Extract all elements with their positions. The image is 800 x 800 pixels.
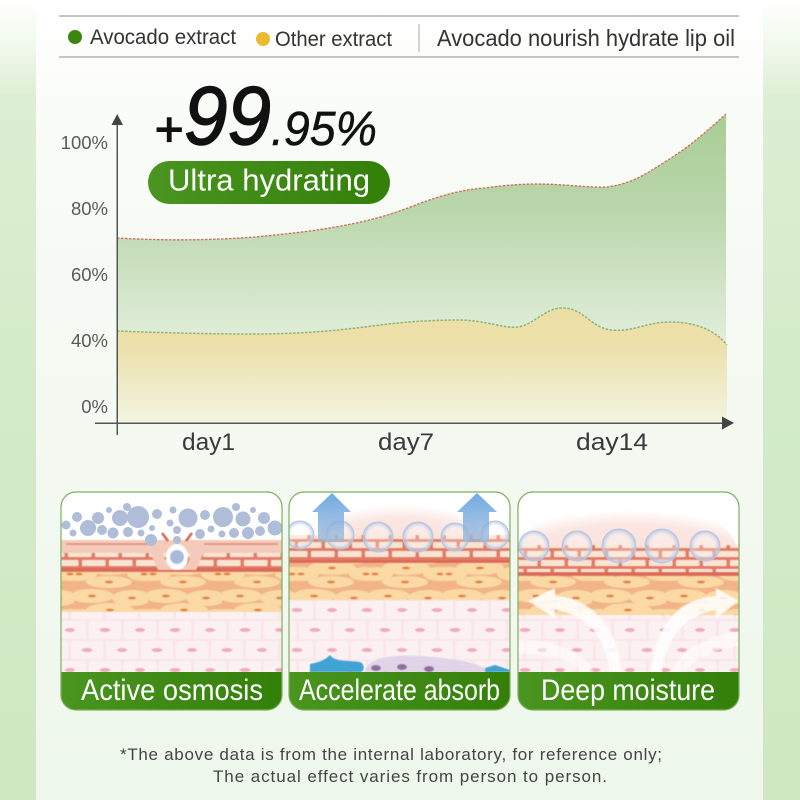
skin layers (58, 540, 285, 672)
x axis labels: day14 (576, 429, 648, 456)
headline stat (154, 69, 377, 162)
footnote (120, 745, 662, 786)
particles (62, 503, 282, 546)
headline stat: + (154, 104, 183, 157)
footnote: The actual effect varies from person to person. (213, 767, 607, 786)
area chart (61, 114, 734, 456)
line: other extract (117, 308, 727, 345)
area: avocado extract (117, 114, 726, 345)
y axis labels: 0% (81, 396, 108, 417)
y axis (112, 114, 123, 435)
x axis labels: day7 (378, 429, 434, 456)
icon: white arrows right (651, 588, 739, 672)
label band (61, 672, 282, 710)
icon: pore with absorption (66, 533, 278, 570)
x axis (95, 416, 734, 430)
water droplets (286, 521, 509, 552)
y axis labels: 40% (71, 330, 108, 351)
panel: active osmosis (58, 492, 285, 710)
y axis labels: 100% (61, 132, 108, 153)
y axis labels: 80% (71, 198, 108, 219)
icon: blue arrows up (312, 493, 497, 542)
deep tissue (310, 655, 510, 672)
label: accelerate absorb: Accelerate absorb (299, 674, 500, 707)
badge: ultra hydrating: Ultra hydrating (168, 162, 370, 198)
skin layers (518, 514, 738, 672)
legend: other extract: Other extract (275, 28, 392, 51)
area: other extract (117, 308, 727, 423)
legend: avocado extract: Avocado extract (90, 26, 236, 49)
x axis labels: day1 (182, 429, 235, 456)
panel: accelerate absorb (286, 492, 513, 710)
panel: deep moisture (515, 492, 742, 710)
badge: ultra hydrating (148, 161, 390, 204)
label band (289, 672, 510, 710)
label: deep moisture: Deep moisture (541, 674, 715, 707)
label: active osmosis: Active osmosis (81, 674, 263, 707)
footnote: *The above data is from the internal laboratory, for reference only; (120, 745, 662, 764)
icon: white arrows left (518, 588, 621, 672)
y axis labels: 60% (71, 264, 108, 285)
label band (518, 672, 739, 710)
skin layers (290, 508, 510, 672)
headline stat: .95% (271, 103, 377, 156)
headline stat: 99 (184, 69, 271, 162)
y axis labels (61, 132, 108, 417)
product name: Avocado nourish hydrate lip oil (437, 25, 735, 51)
water droplets (519, 529, 720, 563)
legend header (59, 15, 739, 58)
line: avocado extract (117, 114, 726, 240)
x axis labels (182, 429, 648, 456)
